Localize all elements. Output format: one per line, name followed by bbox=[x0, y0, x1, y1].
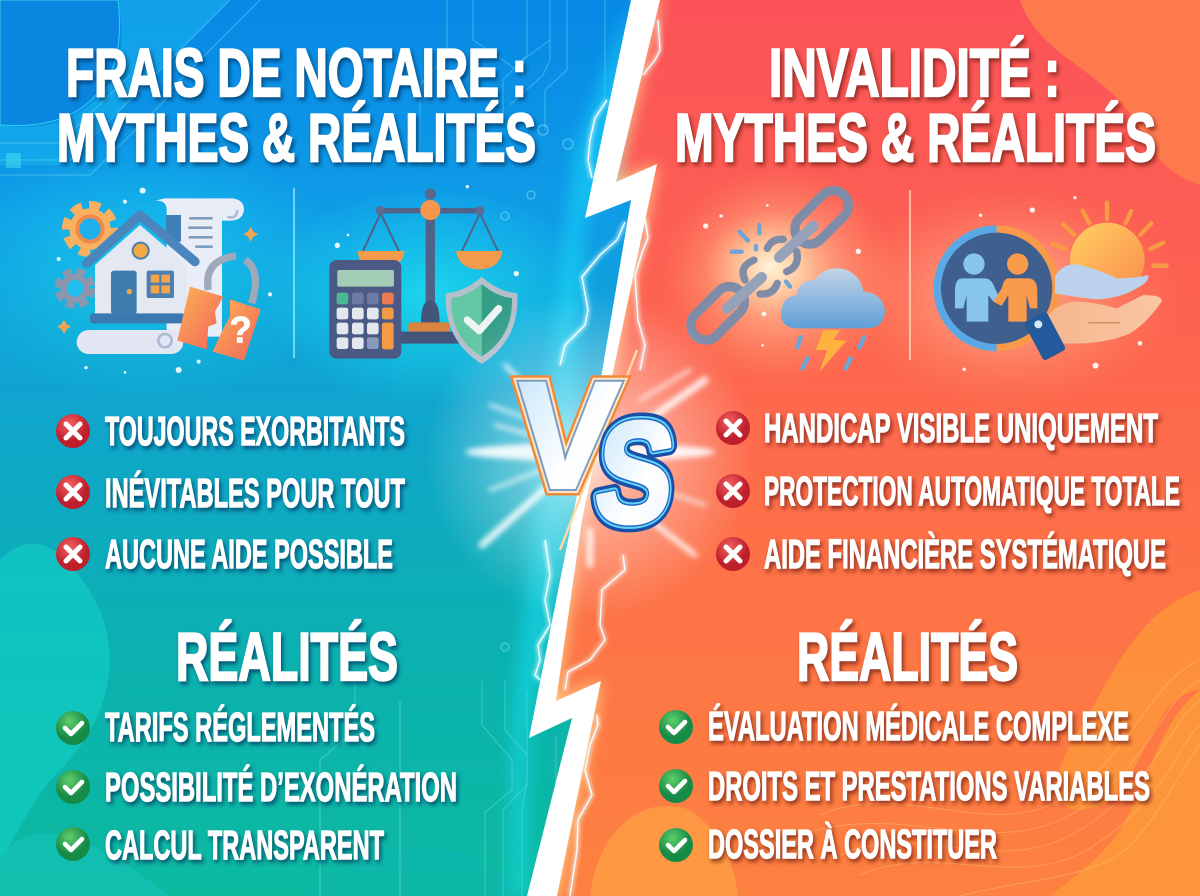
list: réalités invalidité bbox=[659, 703, 1150, 867]
title: frais de notaire: MYTHES & RÉALITÉS bbox=[57, 100, 536, 176]
decorative circuit lines bbox=[0, 0, 605, 896]
letter S: S bbox=[588, 392, 682, 553]
grey gear bbox=[58, 272, 92, 305]
icon: check bbox=[56, 711, 90, 745]
icon: scales, calculator and shield bbox=[329, 185, 519, 364]
icon: cross bbox=[56, 414, 90, 448]
icon: house, contract and broken lock bbox=[57, 188, 272, 374]
sun bbox=[1053, 203, 1167, 297]
icon: check bbox=[659, 710, 693, 744]
house bbox=[87, 215, 195, 323]
vs badge bbox=[511, 351, 682, 553]
icon: check bbox=[56, 827, 90, 861]
letter V: V bbox=[511, 351, 623, 519]
title: frais de notaire bbox=[57, 35, 536, 176]
icon: cross bbox=[716, 474, 750, 508]
divider: left icons bbox=[293, 188, 295, 358]
heading: réalités droite: RÉALITÉS bbox=[797, 619, 1018, 695]
broken padlock bbox=[177, 256, 261, 361]
myth item: AUCUNE AIDE POSSIBLE bbox=[105, 531, 393, 577]
list: réalités frais de notaire bbox=[56, 704, 457, 868]
list: mythes invalidité bbox=[716, 405, 1180, 577]
icon: broken chain and storm cloud bbox=[685, 184, 885, 372]
broken padlock: ? bbox=[229, 310, 252, 351]
reality item: POSSIBILITÉ D’EXONÉRATION bbox=[105, 764, 457, 810]
thin lightning arcs bbox=[535, 20, 660, 896]
title: frais de notaire: FRAIS DE NOTAIRE : bbox=[66, 35, 527, 111]
reality item: DOSSIER À CONSTITUER bbox=[708, 821, 997, 867]
letter V: V bbox=[511, 351, 623, 519]
icon: cross bbox=[56, 537, 90, 571]
letter V: V bbox=[511, 351, 623, 519]
sparkles bbox=[57, 227, 258, 334]
vs burst rays bbox=[425, 290, 755, 620]
divider: right icons bbox=[909, 190, 911, 360]
shield bbox=[446, 277, 517, 364]
upper hand bbox=[1055, 264, 1148, 299]
decorative blob: top left bbox=[0, 0, 120, 126]
letter S: S bbox=[588, 392, 682, 553]
myth item: TOUJOURS EXORBITANTS bbox=[105, 408, 405, 454]
icon: cross bbox=[716, 537, 750, 571]
spark fragments bbox=[732, 225, 790, 287]
paper scroll bbox=[77, 198, 244, 354]
reality item: TARIFS RÉGLEMENTÉS bbox=[105, 704, 375, 750]
badge bbox=[937, 229, 1056, 348]
icon: check bbox=[56, 770, 90, 804]
list: mythes frais de notaire bbox=[56, 408, 405, 577]
decorative waves bbox=[800, 660, 1200, 896]
panel: left background bbox=[0, 0, 660, 896]
balance scale bbox=[357, 188, 503, 344]
lower hand bbox=[1045, 295, 1162, 344]
icon: people, sun and caring hands bbox=[937, 196, 1167, 371]
icon: check bbox=[659, 769, 693, 803]
cloud bbox=[781, 268, 885, 328]
calculator bbox=[329, 260, 401, 359]
rain bbox=[797, 337, 864, 368]
myth item: INÉVITABLES POUR TOUT bbox=[105, 470, 405, 516]
letter V: V bbox=[511, 351, 623, 519]
title: invalidité: INVALIDITÉ : bbox=[769, 35, 1060, 111]
cuff bbox=[1024, 311, 1066, 361]
orange gear bbox=[66, 205, 114, 253]
panel: right background bbox=[520, 0, 1200, 896]
reality item: CALCUL TRANSPARENT bbox=[105, 822, 384, 868]
lightning bbox=[816, 330, 847, 372]
title: invalidité bbox=[675, 35, 1156, 176]
letter S: S bbox=[588, 392, 682, 553]
heading: réalités gauche: RÉALITÉS bbox=[176, 619, 398, 695]
lightning bolt divider bbox=[510, 0, 660, 896]
letter S: S bbox=[588, 392, 682, 553]
icon: cross bbox=[716, 411, 750, 445]
chain links bbox=[685, 184, 855, 346]
icon: check bbox=[659, 828, 693, 862]
icon: cross bbox=[56, 475, 90, 509]
